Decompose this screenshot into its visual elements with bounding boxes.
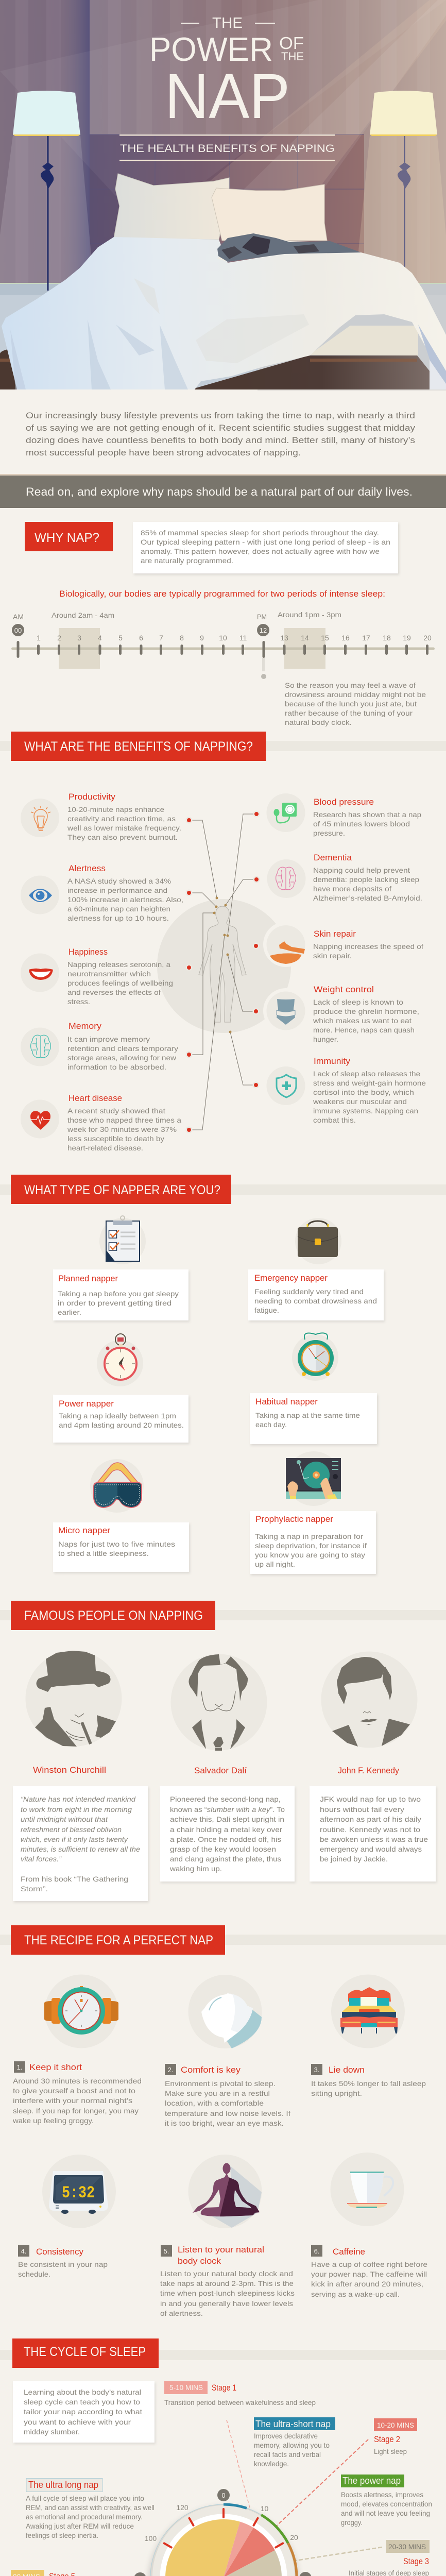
timeline chart: 7 (159, 634, 163, 642)
benefit: happiness: stress. (67, 997, 90, 1006)
heading: benefits (0, 732, 446, 761)
benefit: weight control: which makes us want to eat (313, 1016, 411, 1025)
benefit: productivity: creativity and reaction time, as (67, 815, 176, 823)
benefit: alertness: Alertness (68, 863, 106, 873)
card: JFK: routine. Kennedy was not to (320, 1825, 420, 1834)
ultra-short nap (254, 2417, 335, 2468)
benefit: blood pressure: Blood pressure (314, 797, 374, 807)
card: Churchill quote: vital forces.” (21, 1855, 62, 1863)
stage 2: Light sleep (374, 2447, 407, 2455)
benefit: happiness: neurotransmitter which (67, 970, 151, 978)
card: JFK: afternoon as part of his daily (320, 1815, 421, 1823)
timeline chart: AM (13, 613, 24, 621)
benefit: weight control: produce the ghrelin hormone, (313, 1007, 419, 1015)
names: John F. Kennedy (338, 1766, 399, 1775)
read-on band (0, 474, 446, 508)
card: planned napper (53, 1269, 188, 1320)
benefit: dementia: Alzheimer’s-related B-Amyloid. (313, 894, 422, 902)
benefit: dementia: dementia: people lacking sleep (313, 875, 419, 884)
step 4 (18, 2245, 108, 2278)
ultra-short nap: recall facts and verbal (254, 2450, 321, 2459)
step 2: temperature and low noise levels. If (165, 2109, 290, 2117)
benefit: weight control (267, 985, 419, 1043)
step 3: Lie down (329, 2065, 365, 2075)
card: Churchill quote: to work from eight in the morning (21, 1805, 132, 1814)
heading: why nap (25, 522, 113, 551)
benefit: heart disease: those who napped three times a (67, 1116, 181, 1124)
icon: digital clock (42, 2155, 116, 2228)
timeline chart: 20 (423, 634, 432, 642)
intro paragraph: dozing does have countless benefits to both body and mind. Better still, many of history’s (26, 435, 415, 445)
benefit: alertness (21, 863, 183, 922)
icon: left lamp (13, 91, 80, 291)
ultra long nap: A full cycle of sleep will place you into (26, 2494, 144, 2502)
step 6: serving as a wake-up call. (311, 2290, 400, 2298)
card: Dali: known as “ slumber with a key ”. To (170, 1805, 285, 1814)
card: prophylactic napper: up all night. (255, 1560, 295, 1568)
grey throw (217, 233, 361, 262)
sleep cycle dial chart: 20 (290, 2533, 298, 2541)
benefit: alertness: a 60-minute nap can heighten (67, 905, 170, 913)
card: prophylactic napper: you know you are going to stay (255, 1551, 365, 1559)
benefit: immunity: weakens our muscular and (313, 1097, 407, 1106)
portrait: Churchill (26, 1651, 122, 1747)
read-on band: Read on, and explore why naps should be a natural part of our daily lives. (26, 485, 413, 498)
benefit: skin repair: skin repair. (313, 952, 352, 960)
benefit: heart disease: heart-related disease. (67, 1144, 143, 1152)
panel: why nap text: anomaly. This pattern however, does not actually agree with how we (141, 547, 380, 555)
power nap: Boosts alertness, improves (341, 2490, 423, 2499)
intro paragraph: of us saying we are not getting enough of it. Recent scientific studies suggest that midday (26, 423, 416, 433)
sleep cycle dial chart: 0 (221, 2492, 226, 2499)
ultra long nap: as emotional and procedural memory. (26, 2513, 143, 2521)
step 5: Listen to your natural body clock and (160, 2269, 293, 2278)
panel: why nap text: 85% of mammal species sleep for short periods throughout the day. (141, 529, 379, 537)
heading: famous people (0, 1601, 446, 1630)
card: JFK: be awoken unless it was a true (320, 1835, 428, 1843)
panel: cycle intro: you want to achieve with your (24, 2418, 131, 2426)
title: OF (279, 33, 304, 53)
card: emergency napper: Emergency napper (254, 1273, 328, 1283)
card: Churchill quote: until midnight without that (21, 1815, 108, 1823)
note: body clock: So the reason you may feel a wave of (285, 681, 416, 689)
step 2: 2. (168, 2066, 173, 2074)
benefit: weight control: more. Hence, naps can quash (313, 1026, 415, 1034)
panel: why nap text: Our typical sleeping pattern - with just one long period of sleep - is an (141, 538, 390, 546)
benefit: weight control: Weight control (314, 985, 374, 994)
step 4: schedule. (18, 2270, 50, 2278)
benefit: alertness: A NASA study showed a 34% (67, 877, 171, 885)
timeline chart: 8 (180, 634, 184, 642)
benefit: blood pressure (267, 793, 421, 837)
benefit: immunity: cortisol into the body, which (313, 1088, 414, 1096)
portrait: Kennedy (321, 1652, 417, 1748)
step 1: interfere with your normal night’s (13, 2096, 132, 2105)
step 2: it is too bright, wear an eye mask. (165, 2119, 284, 2127)
benefit: dementia: Napping could help prevent (313, 866, 410, 874)
panel: cycle intro: midday slumber. (24, 2428, 80, 2436)
card: micro napper: to shed a little sleepiness. (58, 1549, 149, 1557)
card: Churchill quote: From his book “The Gathering (21, 1875, 128, 1883)
ultra long nap (26, 2478, 155, 2539)
title: THE (281, 50, 304, 63)
timeline chart: Around 1pm - 3pm (278, 611, 341, 619)
card: Churchill quote: minutes, is sufficient to renew all the (21, 1845, 140, 1853)
benefit: productivity: Productivity (68, 792, 116, 802)
step 4: 4. (21, 2247, 26, 2255)
benefit: immunity: immune systems. Napping can (313, 1107, 418, 1115)
benefit: dementia: Dementia (314, 853, 352, 862)
benefit: alertness: increase in performance and (67, 886, 167, 894)
icon: bed (331, 1974, 405, 2048)
icon: pillow (188, 1975, 262, 2048)
stage 2: Stage 2 (374, 2434, 400, 2444)
benefit: immunity (267, 1056, 426, 1124)
heading: napper types (0, 1175, 446, 1204)
benefit: happiness: Napping releases serotonin, a (67, 960, 170, 969)
benefit: heart disease: Heart disease (68, 1093, 122, 1103)
step 3: sitting upright. (311, 2089, 362, 2097)
heading: recipe (0, 1925, 446, 1955)
benefit: happiness: Happiness (68, 947, 108, 957)
benefit: memory: retention and clears temporary (67, 1044, 178, 1053)
timeline chart: 4 (98, 634, 102, 642)
card: emergency napper: needing to combat drowsiness and (254, 1297, 377, 1305)
icon: clipboard (99, 1216, 146, 1264)
benefit: happiness: and reverses the effects of (67, 988, 161, 996)
title: THE (212, 15, 243, 31)
step 5: of alertness. (160, 2309, 203, 2317)
card: Churchill quote: “Nature has not intended mankind (21, 1795, 136, 1803)
bed frame (0, 326, 446, 389)
timeline chart: 12 (260, 626, 267, 634)
panel: why nap text: are naturally programmed. (141, 556, 233, 565)
timeline chart: 11 (239, 634, 247, 642)
icon: alarm clock (292, 1333, 338, 1381)
timeline chart: 17 (362, 634, 370, 642)
stage 3 (349, 2540, 430, 2576)
benefit: immunity: Lack of sleep also releases the (313, 1070, 420, 1078)
step 1: 1. (17, 2063, 22, 2071)
benefit: productivity: They can also prevent burnout. (67, 833, 178, 841)
panel: cycle intro (13, 2381, 155, 2443)
heading: benefits: WHAT ARE THE BENEFITS OF NAPPING? (24, 739, 253, 754)
card: habitual napper: Habitual napper (255, 1397, 318, 1406)
stage 2 (374, 2418, 417, 2455)
timeline chart: Around 2am - 4am (52, 611, 114, 619)
timeline chart: 5 (118, 634, 123, 642)
step 2 (165, 2064, 290, 2127)
ultra-short nap: The ultra-short nap (255, 2419, 331, 2429)
icon: briefcase (295, 1218, 341, 1264)
step 6 (311, 2245, 427, 2298)
card: Dali: grasp of the key would loosen (170, 1845, 276, 1853)
benefit: immunity: Immunity (314, 1056, 351, 1066)
ultra-short nap: memory, allowing you to (254, 2441, 330, 2449)
pillows (114, 174, 327, 241)
stage 1: 5-10 MINS (169, 2383, 203, 2392)
benefit: dementia: have more deposits of (313, 885, 391, 893)
icon: digital clock: 5:32 (62, 2183, 95, 2202)
benefit: memory: storage areas, allowing for new (67, 1054, 177, 1062)
card: Dali: and clang against the plate, thus (170, 1855, 281, 1863)
title (149, 15, 304, 132)
card: planned napper: earlier. (58, 1308, 81, 1316)
step 3 (311, 2064, 426, 2097)
duvet (2, 233, 446, 389)
names: Salvador Dalí (194, 1766, 247, 1775)
ultra long nap: REM, and can assist with creativity, as well (26, 2503, 155, 2512)
ultra long nap: The ultra long nap (28, 2480, 98, 2490)
step 3: It takes 50% longer to fall asleep (311, 2079, 426, 2088)
benefit: blood pressure: pressure. (313, 829, 345, 837)
step 2: Environment is pivotal to sleep. (165, 2079, 276, 2088)
benefit: blood pressure: of 45 minutes lowers blood (313, 820, 410, 828)
card: JFK: emergency and would always (320, 1845, 422, 1853)
icon: wristwatch (44, 1974, 118, 2048)
sleep cycle dial chart: 120 (176, 2503, 188, 2512)
portrait: Dali (171, 1654, 267, 1751)
stage 3: Stage 3 (403, 2556, 429, 2566)
step 1 (12, 2061, 142, 2125)
stage 2: 10-20 MINS (377, 2421, 414, 2429)
red statement: Biologically, our bodies are typically programmed for two periods of intense sleep: (59, 589, 385, 599)
card: Churchill quote (13, 1786, 148, 1901)
step 4: Consistency (36, 2247, 83, 2257)
benefit: dementia (267, 853, 422, 902)
heading: cycle of sleep (0, 2338, 446, 2368)
benefit: productivity: 10-20-minute naps enhance (67, 805, 164, 814)
intro paragraph (26, 411, 416, 457)
card: micro napper (53, 1522, 189, 1572)
step 5: time when post-lunch sleepiness kicks (160, 2289, 295, 2297)
card: Churchill quote: which, even if it only lasts twenty (21, 1835, 128, 1843)
note: body clock (285, 681, 426, 726)
title: NAP (165, 61, 290, 132)
benefit: memory (21, 1021, 178, 1071)
card: JFK: hours without fail every (320, 1805, 404, 1814)
step 1: Keep it short (29, 2062, 82, 2072)
card: JFK: be joined by Jackie. (320, 1855, 388, 1863)
card: emergency napper: Feeling suddenly very tired and (254, 1287, 364, 1296)
card: Churchill quote: Storm”. (21, 1885, 48, 1893)
names: Winston Churchill (33, 1765, 106, 1775)
benefit: heart disease: less susceptible to death by (67, 1134, 164, 1143)
step 4: Be consistent in your nap (18, 2260, 108, 2268)
icon: right lamp (370, 91, 437, 291)
power nap: and will not leave you feeling (341, 2509, 430, 2517)
card: micro napper: Micro napper (58, 1526, 110, 1535)
benefit: skin repair (267, 925, 423, 964)
timeline chart: PM (257, 613, 267, 621)
timeline chart: 3 (77, 634, 81, 642)
card: JFK (310, 1786, 436, 1882)
ultra long nap: feelings of sleep inertia. (26, 2531, 98, 2539)
benefit: immunity: stress and weight-gain hormone (313, 1079, 426, 1087)
step 2: Comfort is key (181, 2065, 241, 2075)
benefit: happiness: produces feelings of wellbeing (67, 979, 173, 987)
benefit: skin repair: Napping increases the speed of (313, 942, 423, 951)
card: power napper (53, 1395, 188, 1443)
timeline chart: 6 (139, 634, 143, 642)
card: habitual napper: each day. (255, 1420, 287, 1429)
timeline chart: 18 (383, 634, 391, 642)
intro paragraph: Our increasingly busy lifestyle prevents us from taking the time to nap, with nearly a third (26, 411, 415, 420)
benefit: productivity (21, 792, 181, 841)
subtitle: THE HEALTH BENEFITS OF NAPPING (120, 143, 335, 155)
title: POWER (149, 30, 273, 68)
card: power napper: and 4pm lasting around 20 minutes. (59, 1421, 184, 1429)
step 6: 6. (314, 2247, 319, 2255)
step 5: in and you generally have lower levels (160, 2299, 293, 2308)
sleep cycle dial chart (91, 2420, 382, 2576)
benefit: heart disease: week for 30 minutes were 37% (67, 1125, 177, 1133)
body diagram (157, 811, 308, 1133)
card: prophylactic napper: Taking a nap in preparation for (255, 1532, 363, 1540)
icon: stopwatch (97, 1334, 143, 1386)
step 1: Around 30 minutes is recommended (13, 2077, 142, 2085)
card: Dali: waking him up. (169, 1865, 222, 1873)
stage 5 (11, 2570, 95, 2576)
timeline chart: 00 (14, 626, 22, 634)
timeline chart: 16 (341, 634, 350, 642)
panel: why nap text (133, 522, 398, 573)
note: body clock: drowsiness around midday might not be (285, 690, 426, 699)
step 5: body clock (178, 2256, 221, 2266)
benefit: alertness: 100% increase in alertness. Also, (67, 895, 183, 904)
card: emergency napper: fatigue. (254, 1306, 279, 1314)
benefit: productivity: well as lower mistake frequency. (67, 824, 181, 832)
card: Churchill quote: refreshment of blessed oblivion (21, 1825, 122, 1834)
step 5: Listen to your natural (178, 2245, 264, 2255)
step 1: sleep. If you nap for longer, you may (13, 2107, 139, 2115)
note: body clock: because of the lunch you just ate, but (285, 700, 417, 708)
ultra-short nap: knowledge. (254, 2460, 289, 2468)
card: prophylactic napper: Prophylactic napper (255, 1514, 333, 1524)
card: Dali: Pioneered the second-long nap, (170, 1795, 281, 1803)
timeline chart: 19 (403, 634, 411, 642)
step 1: wake up feeling groggy. (12, 2116, 94, 2125)
note: body clock: natural body clock. (285, 718, 352, 726)
card: planned napper: in order to prevent getting tired (58, 1299, 171, 1307)
ultra-short nap: Improves declarative (254, 2432, 318, 2440)
sleep cycle dial chart: 10 (261, 2504, 268, 2513)
heading: recipe: THE RECIPE FOR A PERFECT NAP (24, 1933, 213, 1947)
hero illustration: bedroom (0, 0, 446, 391)
card: habitual napper (250, 1393, 377, 1444)
timeline chart: 9 (200, 634, 204, 642)
step 5 (160, 2245, 295, 2317)
timeline chart: 15 (321, 634, 329, 642)
icon: sleep mask (90, 1459, 144, 1513)
card: Dali: a chair holding a metal key over (170, 1825, 282, 1834)
benefit: heart disease: A recent study showed that (67, 1107, 165, 1115)
step 6: kick in after around 20 minutes, (311, 2280, 423, 2288)
timeline chart: 14 (301, 634, 309, 642)
step 2: location, with a comfortable (165, 2099, 264, 2107)
stage 3: 20-30 MINS (388, 2543, 426, 2551)
benefit: weight control: Lack of sleep is known to (313, 998, 403, 1006)
note: body clock: rather because of the tuning of your (285, 709, 413, 717)
heading: why nap: WHY NAP? (35, 531, 99, 545)
step 5: take naps at around 2-3pm. This is the (160, 2279, 294, 2287)
card: prophylactic napper (250, 1511, 376, 1574)
step 3: 3. (314, 2066, 319, 2074)
panel: cycle intro: Learning about the body’s natural (24, 2388, 141, 2396)
card: JFK: JFK would nap for up to two (320, 1795, 421, 1803)
benefit: skin repair: Skin repair (314, 929, 356, 939)
benefit: blood pressure: Research has shown that a nap (313, 810, 421, 819)
power nap (341, 2475, 432, 2527)
stage 1: Stage 1 (212, 2383, 236, 2393)
step 5: 5. (164, 2247, 169, 2255)
stage 1 (164, 2381, 316, 2406)
icon: coffee cup (331, 2153, 404, 2226)
card: planned napper: Taking a nap before you get sleepy (58, 1290, 179, 1298)
card: Dali: achieve this, Dalí slept upright in (170, 1815, 284, 1823)
timeline chart: 10 (219, 634, 227, 642)
benefit: immunity: combat this. (313, 1116, 356, 1124)
card: planned napper: Planned napper (58, 1274, 118, 1283)
timeline chart: 1 (37, 634, 41, 642)
timeline chart: 13 (280, 634, 288, 642)
benefit: weight control: hunger. (313, 1035, 338, 1043)
icon: meditation (188, 2155, 262, 2228)
benefit: memory: information to be absorbed. (67, 1063, 166, 1071)
intro paragraph: most successful people have been strong advocates of napping. (26, 448, 301, 457)
benefit: alertness: alertness for up to 10 hours. (67, 914, 169, 922)
timeline chart: 2 (57, 634, 61, 642)
card: micro napper: Naps for just two to five minutes (58, 1540, 175, 1548)
panel: cycle intro: sleep cycle can teach you how to (24, 2398, 140, 2406)
card: emergency napper (248, 1269, 384, 1320)
card: Dali: a plate. Once he nodded off, his (170, 1835, 281, 1843)
benefit: heart disease (21, 1093, 181, 1152)
card: power napper: Taking a nap ideally between 1pm (59, 1412, 176, 1420)
power nap: The power nap (342, 2476, 401, 2486)
card: Dali (160, 1786, 295, 1882)
card: habitual napper: Taking a nap at the same time (255, 1411, 360, 1419)
step 6: Caffeine (333, 2247, 365, 2257)
heading: napper types: WHAT TYPE OF NAPPER ARE YOU? (24, 1183, 220, 1197)
timeline chart (11, 611, 435, 679)
icon: turntable (286, 1451, 341, 1506)
heading: famous people: FAMOUS PEOPLE ON NAPPING (24, 1608, 203, 1623)
stage 1: Transition period between wakefulness and sleep (164, 2398, 316, 2406)
step 6: your power nap. The caffeine will (311, 2270, 427, 2278)
benefit: memory: Memory (68, 1021, 102, 1031)
power nap: mood, elevates concentration (341, 2500, 432, 2508)
step 6: Have a cup of coffee right before (311, 2260, 427, 2268)
benefit: happiness (21, 947, 173, 1006)
card: power napper: Power napper (59, 1399, 114, 1409)
ultra long nap: Awaking just after REM will reduce (26, 2522, 134, 2530)
names (33, 1765, 399, 1775)
power nap: groggy. (341, 2518, 363, 2527)
card: prophylactic napper: sleep deprivation, for instance if (255, 1541, 367, 1550)
heading: cycle of sleep: THE CYCLE OF SLEEP (24, 2345, 146, 2359)
panel: cycle intro: tailor your nap according to what (24, 2408, 142, 2416)
step 2: Make sure you are in a restful (165, 2089, 270, 2097)
sleep cycle dial chart: 100 (145, 2534, 157, 2543)
benefit: memory: It can improve memory (67, 1035, 150, 1043)
step 1: to give yourself a boost and not to (13, 2087, 135, 2095)
